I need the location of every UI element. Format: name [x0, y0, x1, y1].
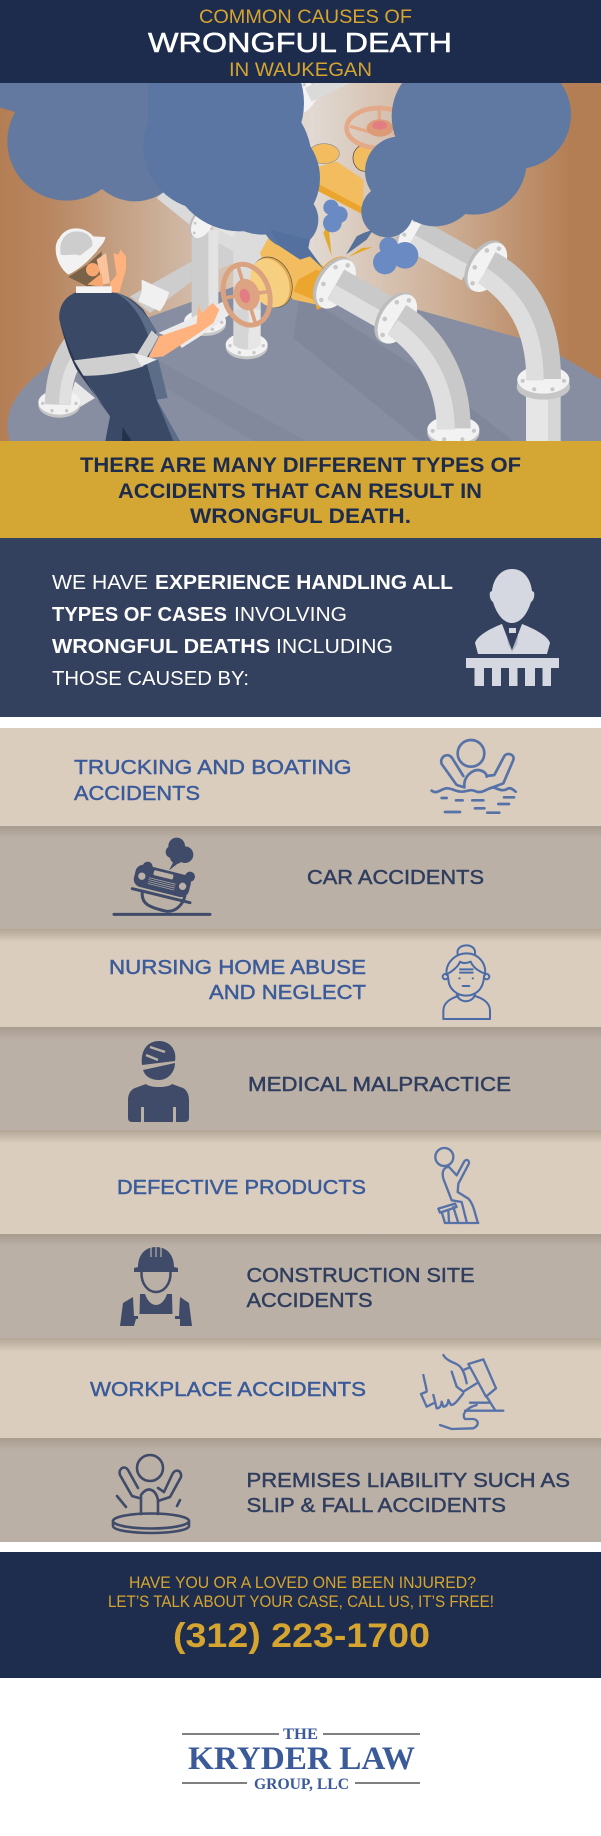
row text: ACCIDENTS [74, 783, 200, 805]
logo: GROUP, LLC [254, 1776, 349, 1793]
title: WRONGFUL DEATH [148, 27, 452, 58]
sparks [323, 229, 372, 257]
icon: construction worker [120, 1246, 192, 1326]
row text: ACCIDENTS [246, 1290, 372, 1312]
header line: common causes of: COMMON CAUSES OF [199, 7, 412, 28]
row text: MEDICAL MALPRACTICE [248, 1074, 511, 1096]
row text [109, 957, 366, 1004]
panel: premises liability [0, 1438, 601, 1542]
icon: swimmer in water [432, 740, 516, 813]
right smoke cloud [346, 83, 571, 254]
front pipes [312, 220, 570, 441]
experience text: INVOLVING [234, 604, 347, 626]
large valve wheel [220, 262, 273, 328]
panel: experience [0, 538, 601, 717]
row text: DEFECTIVE PRODUCTS [117, 1177, 366, 1199]
panel: call to action [0, 1552, 601, 1678]
worker [56, 228, 219, 441]
icon: lawyer at bench [466, 569, 559, 686]
header line: in Waukegan: IN WAUKEGAN [229, 60, 372, 81]
row text: AND NEGLECT [209, 982, 366, 1004]
experience text: THOSE CAUSED BY: [52, 668, 249, 690]
small valve wheel [344, 106, 396, 150]
row text: CONSTRUCTION SITE [246, 1265, 474, 1287]
icon: hand on tool [421, 1355, 503, 1429]
icon: elderly woman [443, 945, 490, 1019]
panel: construction site accidents [0, 1234, 601, 1338]
experience text: EXPERIENCE HANDLING ALL [155, 572, 453, 594]
experience text: WRONGFUL DEATHS [52, 636, 270, 658]
panel: medical malpractice [0, 1027, 601, 1130]
row text: NURSING HOME ABUSE [109, 957, 366, 979]
icon: person falling from stool [435, 1148, 478, 1223]
icon: person falling through manhole [113, 1455, 189, 1533]
banner text: ACCIDENTS THAT CAN RESULT IN [118, 480, 482, 503]
banner text: WRONGFUL DEATH. [190, 505, 411, 528]
call to action text: HAVE YOU OR A LOVED ONE BEEN INJURED? [129, 1574, 476, 1592]
row text: TRUCKING AND BOATING [74, 757, 352, 779]
panel: nursing home abuse and neglect [0, 929, 601, 1027]
logo: THE [283, 1726, 318, 1743]
logo: KRYDER LAW [188, 1741, 415, 1777]
centre smoke cloud [144, 83, 324, 270]
floor [7, 280, 601, 441]
row text [246, 1470, 570, 1517]
hero illustration: burst pipe and worker [0, 83, 601, 441]
banner text [80, 454, 521, 528]
icon: overturned car [114, 838, 210, 914]
left smoke cloud [0, 83, 164, 202]
logo [182, 1726, 420, 1793]
panel: trucking and boating accidents [0, 728, 601, 826]
call to action text: LET’S TALK ABOUT YOUR CASE, CALL US, IT’S FREE! [108, 1593, 494, 1611]
experience text: TYPES OF CASES [52, 604, 227, 626]
icon: injured patient [128, 1041, 189, 1122]
panel: workplace accidents [0, 1338, 601, 1438]
call to action text [108, 1574, 494, 1611]
row text: PREMISES LIABILITY SUCH AS [246, 1470, 570, 1492]
yellow valve [250, 143, 372, 310]
phone number: (312) 223-1700 [173, 1617, 430, 1655]
row text: SLIP & FALL ACCIDENTS [246, 1495, 506, 1517]
back pipes [38, 72, 353, 418]
header band [0, 0, 601, 83]
row text: CAR ACCIDENTS [307, 867, 484, 889]
small smoke puffs [323, 200, 418, 274]
row text: WORKPLACE ACCIDENTS [90, 1379, 366, 1401]
gold banner [0, 441, 601, 538]
experience text: INCLUDING [276, 636, 393, 658]
row text [246, 1265, 474, 1312]
experience text [52, 572, 453, 690]
banner text: THERE ARE MANY DIFFERENT TYPES OF [80, 454, 521, 477]
panel: car accidents [0, 826, 601, 929]
panel: defective products [0, 1130, 601, 1234]
row text [74, 757, 352, 805]
experience text: WE HAVE [52, 572, 148, 594]
